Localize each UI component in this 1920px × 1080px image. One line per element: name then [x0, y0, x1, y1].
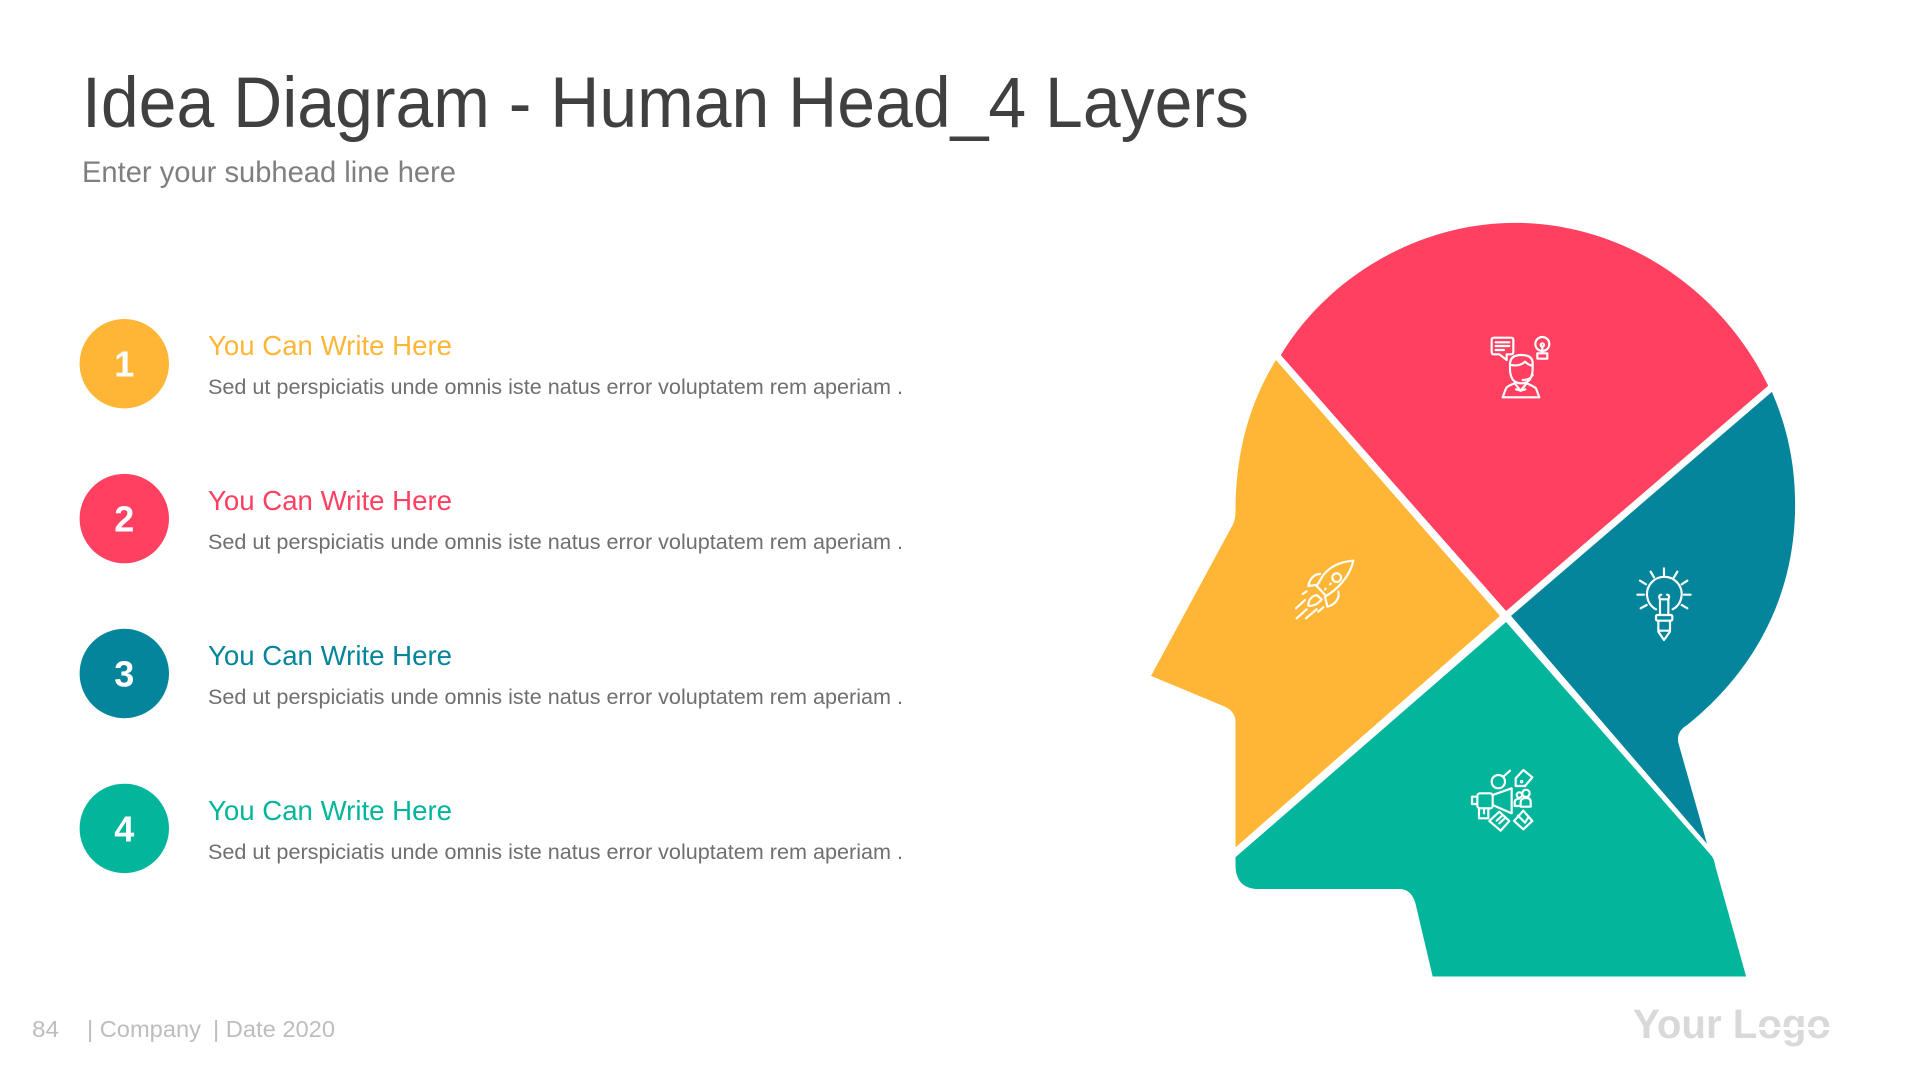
- icon: rocket: [1296, 561, 1353, 618]
- number badge 1: [80, 319, 169, 408]
- list of four items: [80, 319, 903, 873]
- title: Idea Diagram - Human Head_4 Layers: [82, 64, 1249, 143]
- item 1: [80, 319, 903, 408]
- item 3: [80, 629, 903, 718]
- item 3 heading: You Can Write Here: [208, 640, 452, 671]
- item 2: [80, 474, 903, 563]
- item 1 heading: You Can Write Here: [208, 330, 452, 361]
- number badge 3: 3: [114, 654, 134, 694]
- icon: support person with chat bubble and bulb: [1492, 337, 1549, 397]
- number badge 2: [80, 474, 169, 563]
- icon: megaphone marketing: [1472, 770, 1532, 831]
- number badge 1: 1: [114, 344, 134, 384]
- item 2 body text: Sed ut perspiciatis unde omnis iste natus error voluptatem rem aperiam .: [208, 531, 903, 554]
- item 2 heading: You Can Write Here: [208, 485, 452, 516]
- head segment: neck (green): [1236, 622, 1746, 977]
- footer page number: 84: [32, 1016, 59, 1042]
- footer company: | Company: [87, 1016, 202, 1042]
- subhead: Enter your subhead line here: [82, 156, 456, 189]
- number badge 4: 4: [114, 808, 134, 850]
- number badge 2: 2: [114, 498, 134, 540]
- human head diagram: [1151, 223, 1795, 977]
- number badge 4: [80, 784, 169, 873]
- footer date: | Date 2020: [213, 1016, 335, 1042]
- item 3 body text: Sed ut perspiciatis unde omnis iste natus error voluptatem rem aperiam .: [208, 686, 903, 709]
- head segment: face (yellow): [1151, 360, 1500, 847]
- number badge 3: [80, 629, 169, 718]
- icon: light bulb with pencil: [1637, 568, 1691, 640]
- head segment: crown (pink): [1281, 223, 1768, 611]
- logo placeholder: Your Logo: [1633, 1001, 1831, 1047]
- head segment: back (teal): [1511, 392, 1795, 844]
- item 1 body text: Sed ut perspiciatis unde omnis iste natus error voluptatem rem aperiam .: [208, 376, 903, 399]
- item 4: [80, 784, 903, 873]
- item 4 body text: Sed ut perspiciatis unde omnis iste natus error voluptatem rem aperiam .: [208, 841, 903, 864]
- item 4 heading: You Can Write Here: [208, 795, 452, 826]
